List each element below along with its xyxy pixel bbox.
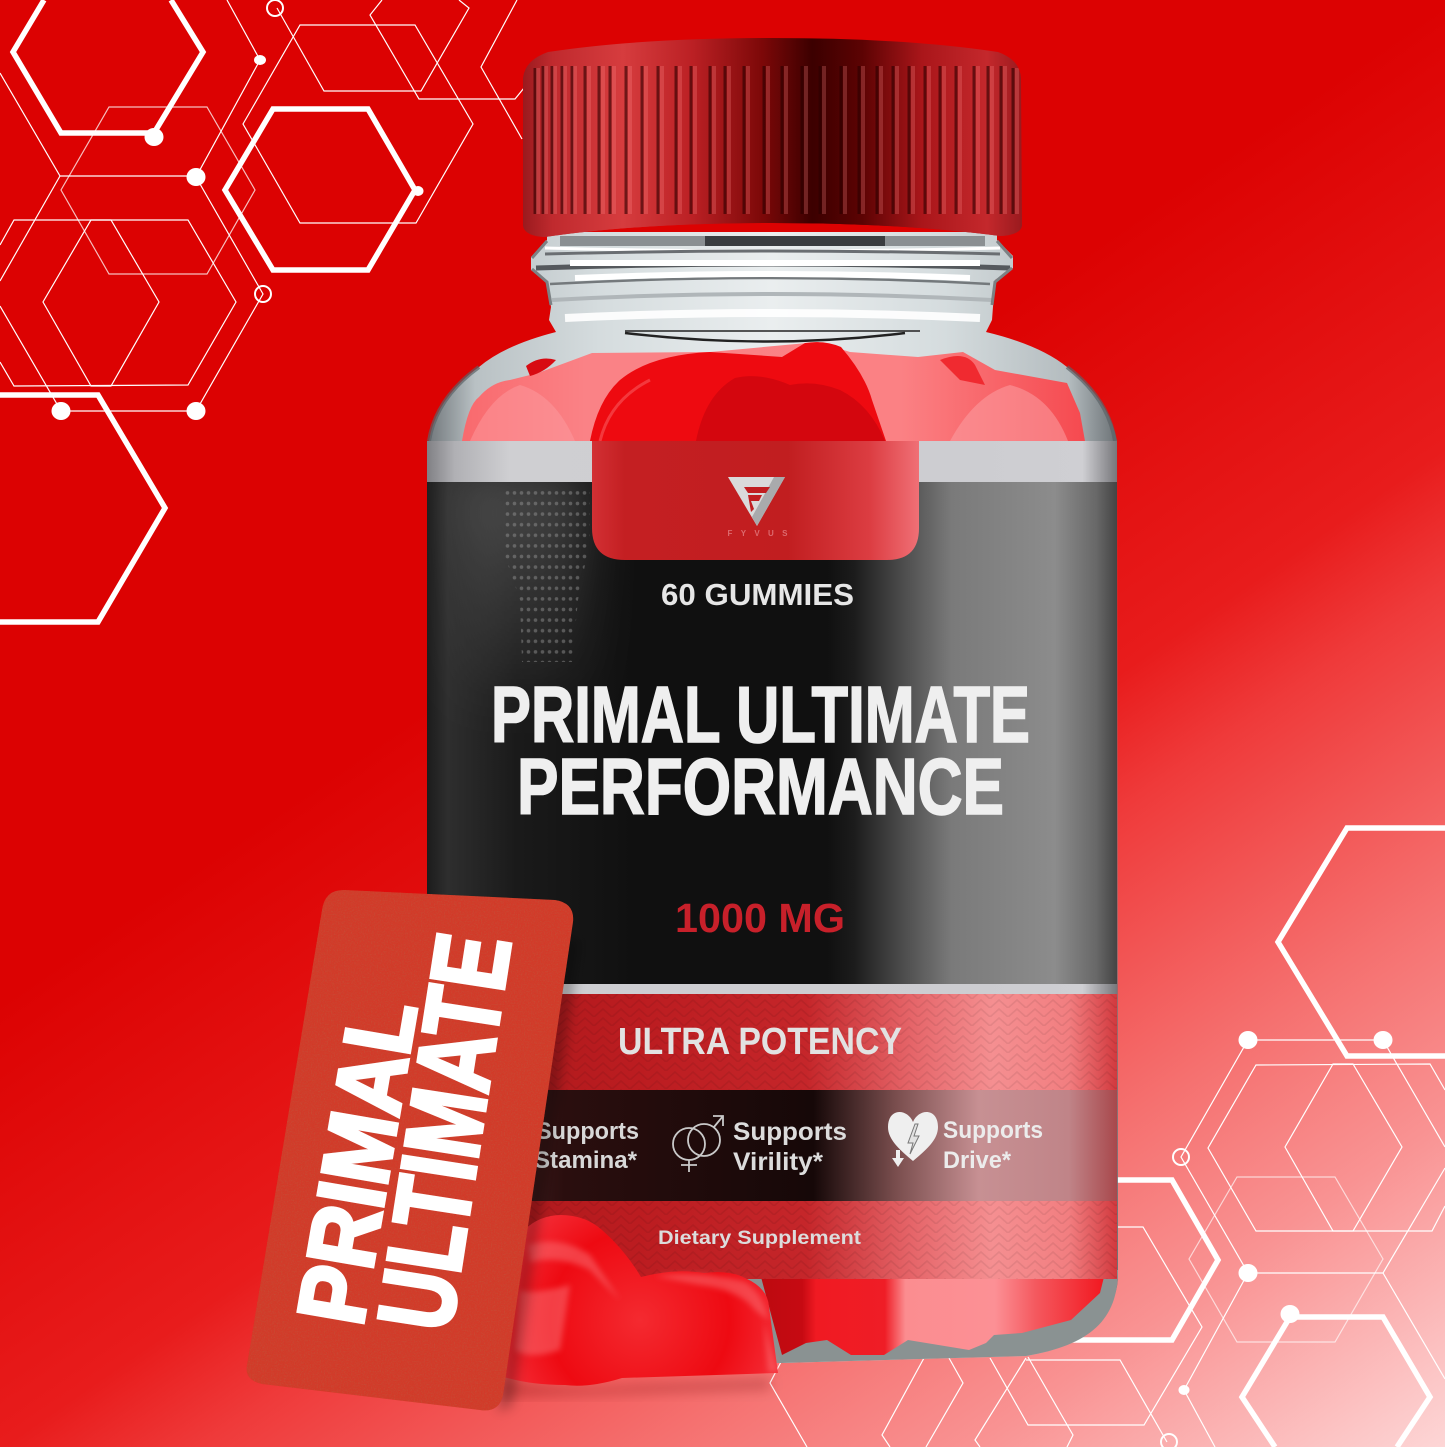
gummies visible at base of bottle — [761, 1277, 1104, 1355]
gummy highlights — [515, 1242, 778, 1372]
text: supports virility: Supports — [733, 1118, 847, 1146]
text: dietary supplement: Dietary Supplement — [658, 1228, 862, 1249]
text: supports stamina — [534, 1118, 639, 1174]
thick hexagons bottom right — [1060, 828, 1445, 1447]
product title: PERFORMANCE — [517, 742, 1004, 831]
icon: FYVUS logo: FYVUS — [728, 529, 788, 538]
icon: FYVUS logo — [728, 477, 788, 538]
cap ribs — [535, 66, 1013, 214]
grey base of the bottle — [427, 1270, 1118, 1363]
icon: gender symbols — [673, 1116, 723, 1172]
panel highlight — [460, 470, 585, 700]
hexagon network: top left — [0, 0, 524, 622]
thick hexagons top left — [0, 0, 415, 622]
text: supports drive — [943, 1117, 1043, 1174]
text: 60 gummies: 60 GUMMIES — [661, 577, 854, 612]
bottle — [427, 36, 1118, 1363]
bottle label — [427, 441, 1117, 1279]
product title: PRIMAL ULTIMATE — [491, 670, 1030, 759]
halftone dots — [503, 488, 590, 662]
neck glass reflections — [532, 241, 1012, 342]
icon: heart with bolt — [888, 1112, 938, 1167]
text: supports drive: Supports — [943, 1117, 1043, 1144]
node dots bottom right — [1178, 1031, 1392, 1395]
red ultra potency band — [427, 994, 1117, 1090]
text: supports virility — [733, 1118, 847, 1176]
card shadow — [498, 935, 580, 1412]
text: supports stamina: Stamina* — [534, 1147, 638, 1174]
text: ultra potency: ULTRA POTENCY — [618, 1021, 902, 1063]
dark benefits band — [427, 1090, 1117, 1202]
red logo tab — [592, 441, 919, 560]
node dots top left — [52, 55, 424, 420]
text: supports stamina: Supports — [536, 1118, 639, 1145]
card body — [247, 890, 573, 1410]
text: supports drive: Drive* — [943, 1147, 1012, 1174]
silver top band — [427, 441, 1117, 483]
red Primal Ultimate card — [247, 890, 573, 1410]
glass bottle silhouette — [427, 232, 1118, 1363]
black label panel — [427, 482, 1117, 986]
gummy shadow — [500, 1378, 770, 1398]
text: supports virility: Virility* — [733, 1148, 823, 1176]
product title — [491, 670, 1030, 831]
shoulder edge shading — [429, 367, 1115, 441]
rings top left — [255, 0, 283, 302]
card text: primal: PRIMAL — [278, 992, 438, 1332]
text: 1000 mg: 1000 MG — [675, 895, 845, 941]
thin hexagon lines top left — [0, 0, 524, 411]
silver divider band — [427, 984, 1117, 995]
bottle cap — [520, 36, 1025, 240]
gummy body — [504, 1215, 778, 1386]
hexagon network: bottom right — [770, 828, 1445, 1447]
red dietary band — [427, 1201, 1117, 1279]
rings bottom right — [1161, 1149, 1189, 1447]
card text: ultimate: ULTIMATE — [356, 926, 534, 1338]
thin hexagon lines bottom right — [770, 1040, 1445, 1447]
gummies visible at top of bottle — [462, 342, 1085, 441]
cap bottom rim — [524, 223, 1022, 237]
foreground gummy — [500, 1215, 778, 1398]
